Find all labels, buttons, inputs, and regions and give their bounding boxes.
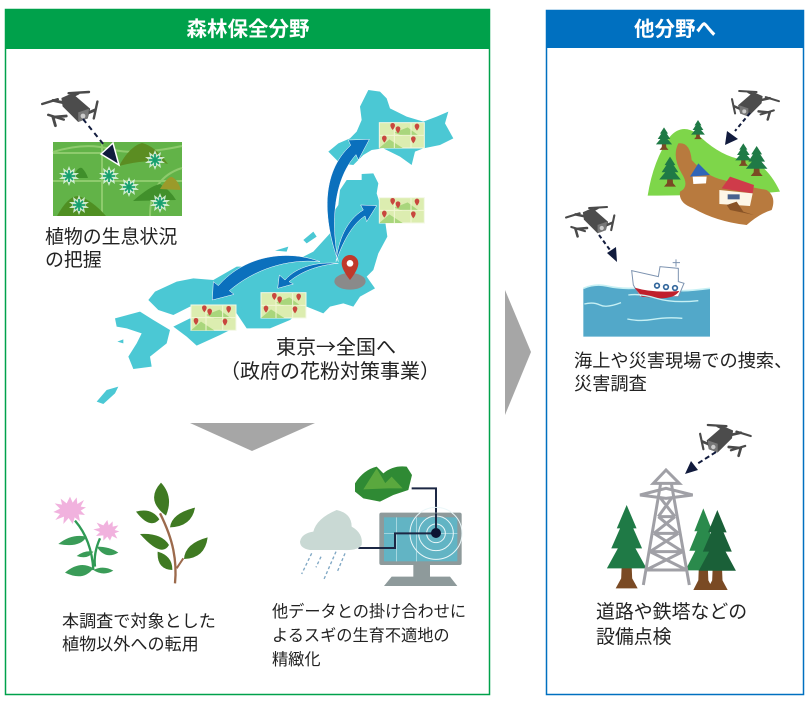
text: combining data: 他データとの掛け合わせに (272, 602, 466, 621)
heading: other fields (546, 10, 804, 48)
map: Japan (97, 90, 453, 404)
arrow: drone to ship (599, 235, 617, 262)
text: Tokyo to nationwide (220, 331, 440, 383)
text: combining data: 精緻化 (272, 651, 321, 669)
illustration: plants (53, 483, 208, 583)
text: Tokyo to nationwide: 東京→全国へ (276, 331, 396, 360)
arrow: drone to tower (685, 452, 716, 474)
text: facility inspection (596, 601, 747, 648)
text: vegetation survey: 植物の生息状況 (45, 226, 177, 248)
illustration: ship at sea (583, 259, 710, 337)
panel: other fields (546, 10, 804, 694)
icon: drone over tower (700, 425, 751, 456)
icon: drone over sea (566, 207, 614, 236)
illustration: radar monitor with data sources (300, 466, 462, 586)
arrow: drone to vegetation map (83, 119, 119, 165)
text: other plants: 植物以外への転用 (62, 635, 199, 654)
heading: forest conservation (5, 9, 490, 49)
arrow: drone to landslide (725, 113, 750, 145)
text: sea and disaster search: 海上や災害現場での捜索、 (574, 351, 792, 371)
text: sea and disaster search (574, 351, 792, 394)
arrows: Tokyo to the nation (212, 139, 377, 300)
heading: forest conservation: 森林保全分野 (186, 18, 310, 41)
arrow: down triangle (190, 423, 315, 451)
marker: Tokyo (334, 255, 366, 290)
text: facility inspection: 道路や鉄塔などの (596, 601, 747, 623)
arrow: right chevron (505, 290, 531, 415)
text: facility inspection: 設備点検 (596, 626, 672, 648)
map: vegetation survey (53, 142, 182, 216)
text: combining data (272, 602, 466, 669)
panel: forest conservation (5, 9, 490, 694)
text: vegetation survey (45, 226, 177, 271)
text: vegetation survey: の把握 (45, 249, 102, 271)
text: combining data: よるスギの生育不適地の (272, 627, 450, 645)
text: other plants: 本調査で対象とした (62, 612, 216, 631)
text: Tokyo to nationwide: （政府の花粉対策事業） (220, 360, 440, 383)
text: other plants (62, 612, 216, 654)
icon: drone over vegetation map (42, 92, 97, 126)
illustration: landslide (648, 120, 780, 225)
survey maps on Japan (191, 123, 424, 330)
heading: other fields: 他分野へ (634, 18, 716, 41)
illustration: trees and pylon (607, 470, 736, 590)
icon: drone over landslide (732, 91, 779, 120)
text: sea and disaster search: 災害調査 (574, 374, 647, 394)
